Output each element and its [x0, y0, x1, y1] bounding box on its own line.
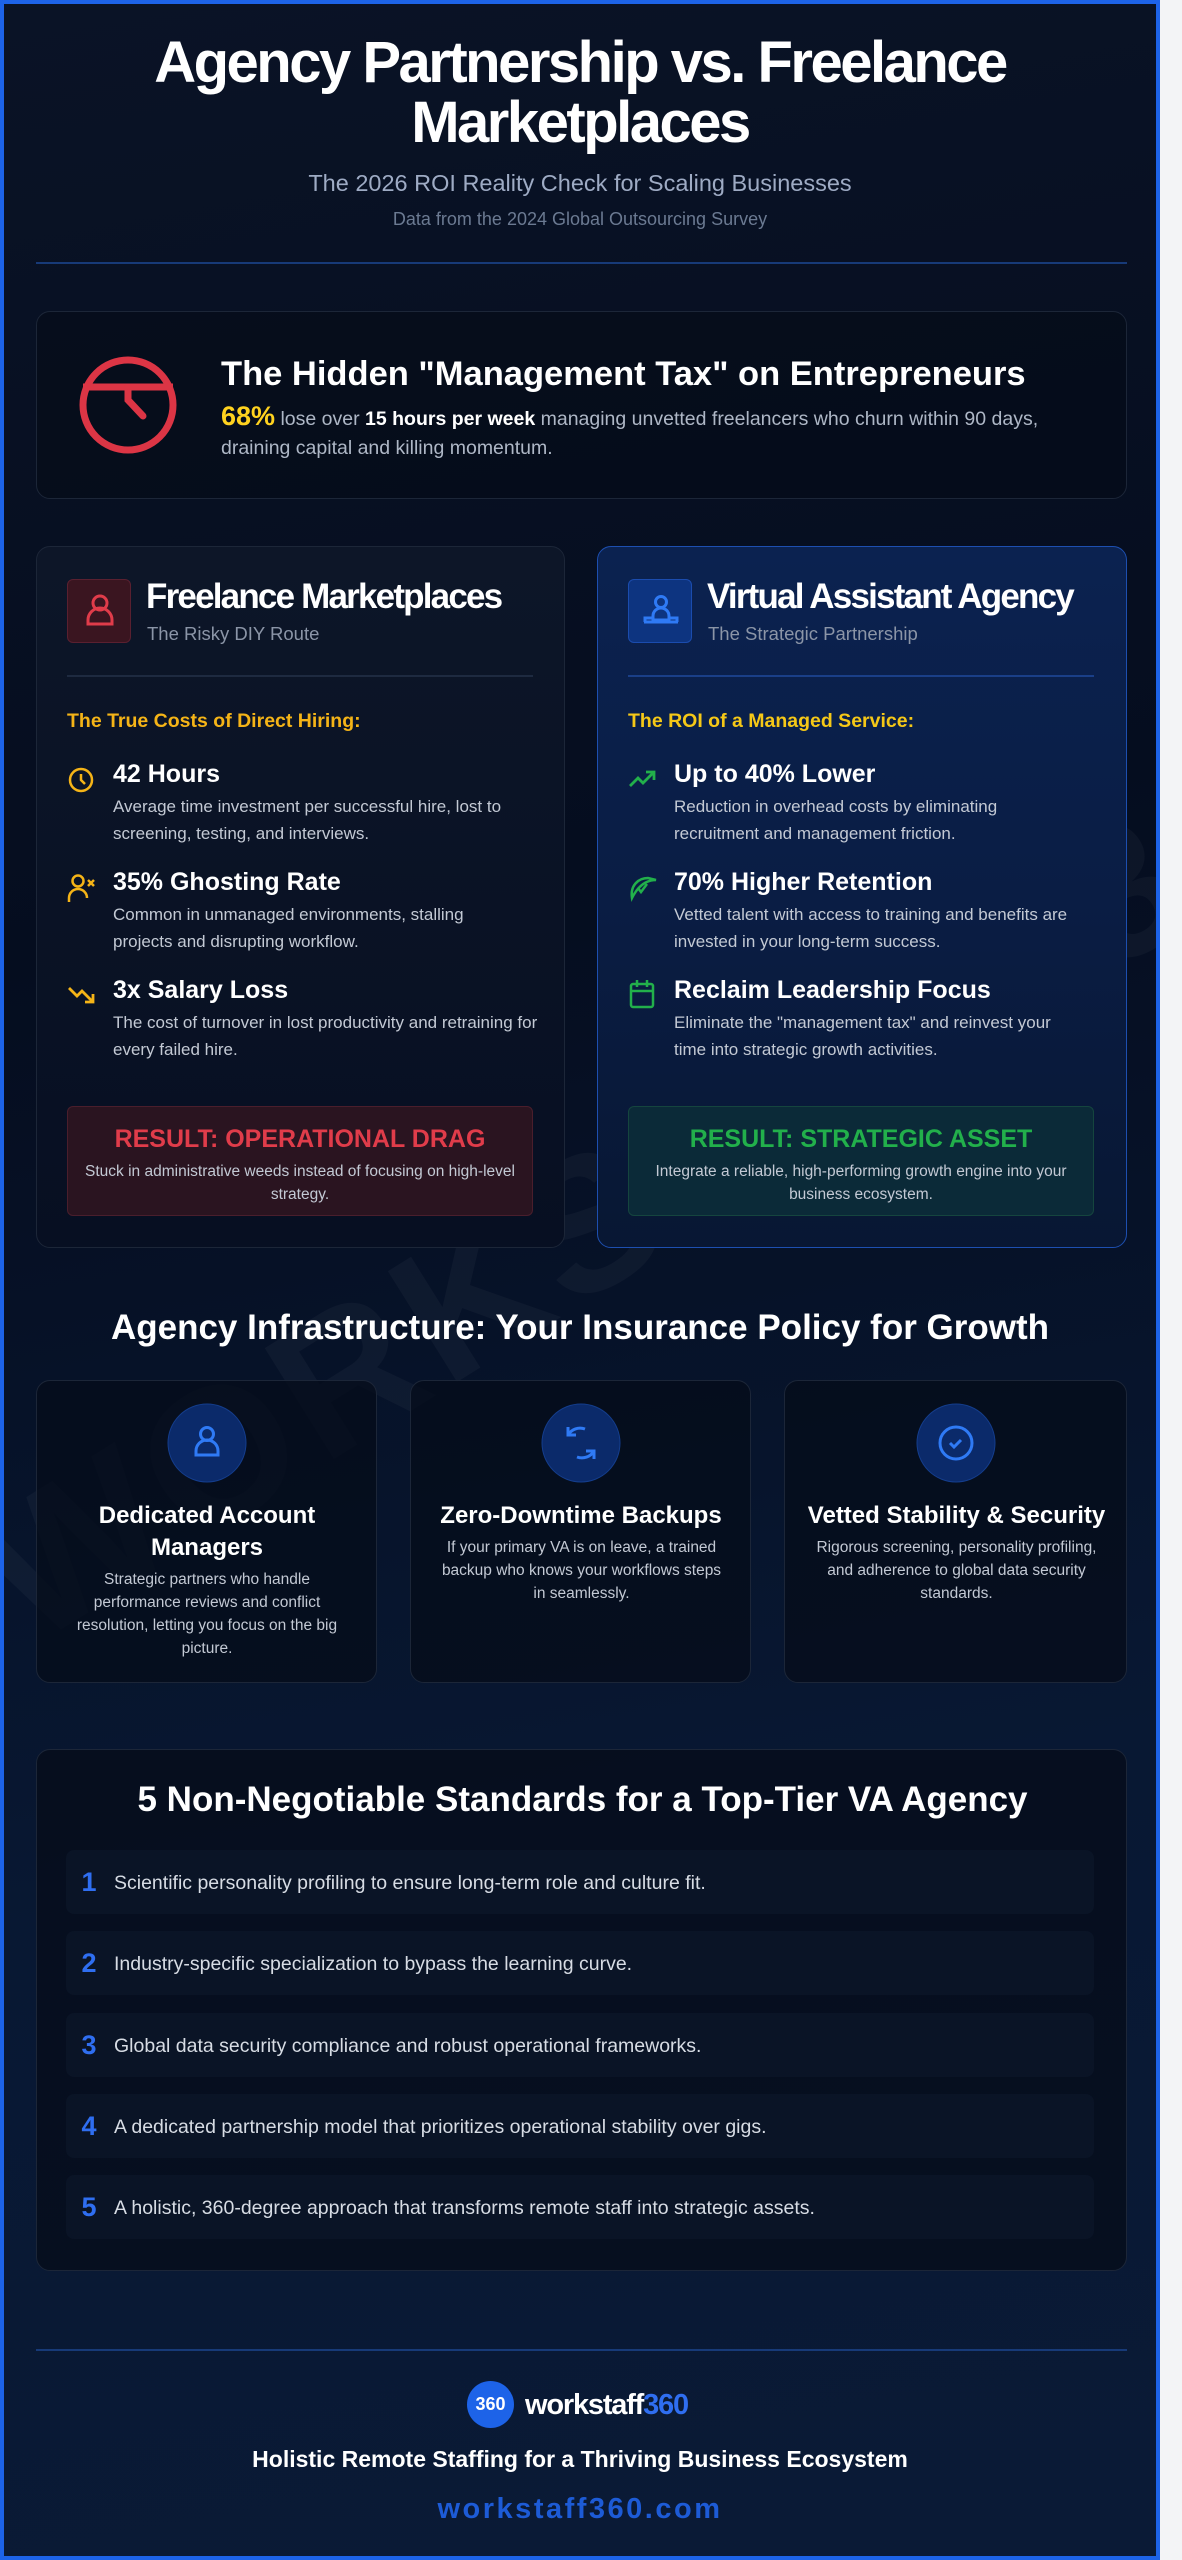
- standard 4: [66, 2094, 1094, 2158]
- result: operational drag: [67, 1106, 533, 1216]
- item: 42 hours: [68, 760, 501, 843]
- item: salary loss: [68, 976, 537, 1059]
- card: account managers: [36, 1380, 377, 1683]
- panel: virtual assistant agency: The Strategic Partnership: [708, 623, 918, 644]
- standard 2: Industry-specific specialization to bypass the learning curve.: [114, 1953, 632, 1975]
- result: strategic asset: RESULT: STRATEGIC ASSET: [690, 1125, 1032, 1153]
- item: leadership focus: [630, 976, 1051, 1059]
- item: retention: [630, 868, 1067, 951]
- item: 40% lower: [629, 760, 997, 843]
- panel: freelance marketplaces: [36, 546, 565, 1248]
- item: 40% lower: Up to 40% Lower: [674, 760, 875, 788]
- footer logo: workstaff360: [525, 2389, 688, 2421]
- section label: The True Costs of Direct Hiring:: [67, 710, 361, 732]
- result: strategic asset: Integrate a reliable, high-performing growth engine into your business ecosystem.: [656, 1163, 1066, 1203]
- card: backups: Zero-Downtime Backups: [440, 1502, 722, 1529]
- standard 3: Global data security compliance and robust operational frameworks.: [114, 2035, 701, 2057]
- section label: The ROI of a Managed Service:: [628, 710, 914, 732]
- title: Marketplaces: [411, 90, 749, 155]
- panel: virtual assistant agency: [597, 546, 1127, 1248]
- item: salary loss: 3x Salary Loss: [113, 976, 288, 1004]
- item: 42 hours: Average time investment per successful hire, lost to screening, testing, and interviews.: [113, 797, 501, 843]
- stat text: 68% lose over 15 hours per week managing unvetted freelancers who churn within 90 days, draining capital and killing momentum.: [221, 401, 1038, 459]
- standard 5: 5: [81, 2192, 97, 2222]
- standard 4: A dedicated partnership model that prioritizes operational stability over gigs.: [114, 2116, 767, 2138]
- standard 4: 4: [81, 2111, 97, 2141]
- icon: user red: [67, 579, 131, 643]
- standard 5: A holistic, 360-degree approach that transforms remote staff into strategic assets.: [114, 2197, 815, 2219]
- card title: Freelance Marketplaces: [146, 577, 501, 616]
- panel: freelance marketplaces: The Risky DIY Route: [147, 623, 319, 644]
- footer logo: 360: [475, 2394, 506, 2414]
- item: ghosting: Common in unmanaged environments, stalling projects and disrupting workflow.: [113, 905, 464, 951]
- title: [154, 30, 1006, 155]
- result: operational drag: Stuck in administrative weeds instead of focusing on high-level strategy.: [85, 1163, 515, 1203]
- standard 3: 3: [81, 2030, 97, 2060]
- card title: Virtual Assistant Agency: [707, 577, 1073, 616]
- url: workstaff360.com: [438, 2493, 722, 2525]
- icon: check circle: [916, 1404, 996, 1482]
- card: backups: [410, 1380, 751, 1683]
- card: stability: Vetted Stability & Security: [808, 1502, 1105, 1529]
- standards heading: 5 Non-Negotiable Standards for a Top-Tier VA Agency: [137, 1780, 1028, 1819]
- heading: The Hidden "Management Tax" on Entrepreneurs: [221, 355, 1026, 393]
- item: ghosting: [68, 868, 464, 951]
- standard 2: 2: [81, 1948, 97, 1978]
- standard 1: [66, 1850, 1094, 1914]
- standard 2: [66, 1931, 1094, 1995]
- card: stability: [784, 1380, 1127, 1683]
- result: strategic asset: [628, 1106, 1094, 1216]
- item: leadership focus: Reclaim Leadership Focus: [674, 976, 991, 1004]
- item: 42 hours: 42 Hours: [113, 760, 220, 788]
- panel: 5 standards: [36, 1749, 1127, 2271]
- standard 1: Scientific personality profiling to ensure long-term role and culture fit.: [114, 1872, 706, 1894]
- standard 3: [66, 2013, 1094, 2077]
- card: backups: If your primary VA is on leave, a trained backup who knows your workflows steps in seamlessly.: [442, 1539, 721, 1602]
- item: salary loss: The cost of turnover in lost productivity and retraining for every failed hire.: [113, 1013, 537, 1059]
- item: retention: Vetted talent with access to training and benefits are invested in your long-term success.: [674, 905, 1067, 951]
- subtitle: The 2026 ROI Reality Check for Scaling Businesses: [308, 170, 852, 196]
- item: retention: 70% Higher Retention: [674, 868, 932, 896]
- title: Agency Partnership vs. Freelance: [154, 30, 1006, 95]
- standard 1: 1: [81, 1867, 97, 1897]
- icon: refresh: [542, 1404, 620, 1482]
- data source: Data from the 2024 Global Outsourcing Survey: [393, 209, 767, 229]
- section heading: infrastructure: Agency Infrastructure: Your Insurance Policy for Growth: [111, 1308, 1049, 1347]
- icon: manager: [168, 1404, 246, 1482]
- panel: management tax: [36, 311, 1127, 499]
- icon: clock: [80, 356, 176, 454]
- icon: team blue: [628, 579, 692, 643]
- card: account managers: Dedicated Account Managers: [99, 1502, 315, 1561]
- item: leadership focus: Eliminate the "management tax" and reinvest your time into strategic growth activities.: [674, 1013, 1051, 1059]
- item: ghosting: 35% Ghosting Rate: [113, 868, 341, 896]
- card: stability: Rigorous screening, personality profiling, and adherence to global data security standards.: [816, 1539, 1096, 1602]
- card: account managers: Strategic partners who handle performance reviews and conflict resolution, letting you focus on the big picture.: [77, 1571, 337, 1657]
- tagline: Holistic Remote Staffing for a Thriving Business Ecosystem: [252, 2446, 908, 2472]
- result: operational drag: RESULT: OPERATIONAL DRAG: [115, 1125, 485, 1153]
- item: 40% lower: Reduction in overhead costs by eliminating recruitment and management friction.: [674, 797, 997, 843]
- footer logo: [467, 2381, 688, 2428]
- standard 5: [66, 2175, 1094, 2239]
